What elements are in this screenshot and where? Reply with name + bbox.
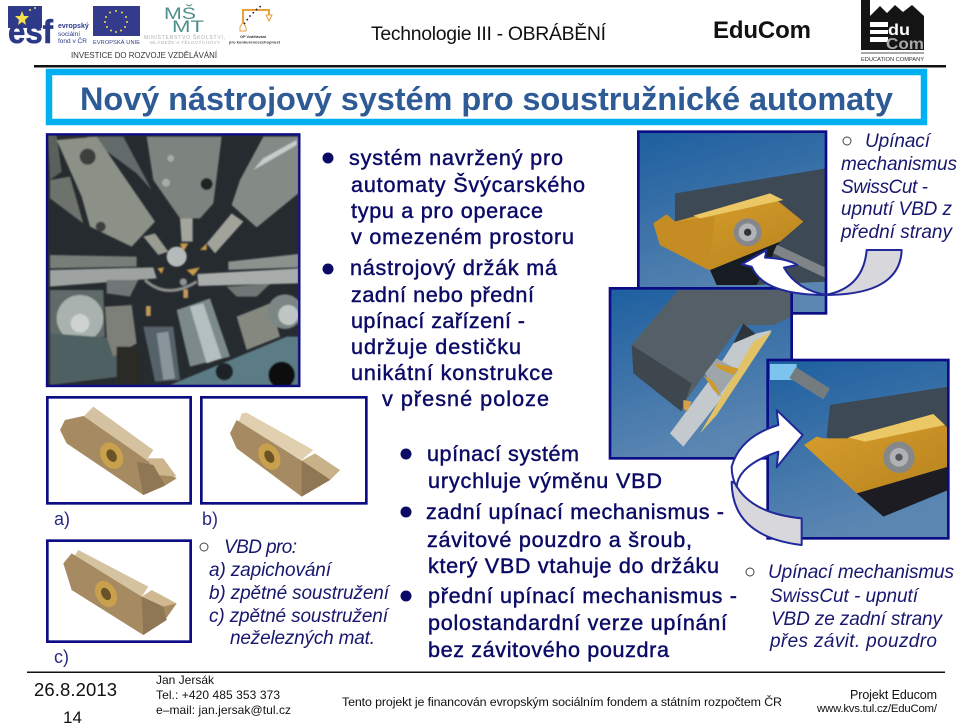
logo: MŠMT: MŠ [164, 4, 196, 23]
callout: front clamping mechanism [840, 131, 958, 243]
callout: rear clamping mechanism: přes závit. pouzdro [769, 631, 937, 652]
footer: project: Projekt Educom [850, 688, 937, 702]
logo: EU flag: EVROPSKÁ UNIE [93, 39, 140, 46]
bulleted text: system description: zadní nebo přední [351, 282, 534, 307]
callout: VBD pro: a) zapichování [209, 560, 333, 581]
logo: ESF evropský sociální fond v ČR: fond v ČR [58, 36, 87, 45]
logo: OP Vzdělávání pro konkurenceschopnost: pro konkurenceschopnost [229, 40, 281, 44]
bulleted text: clamping system: závitové pouzdro a šroub, [427, 527, 692, 552]
bulleted text: system description: unikátní konstrukce [351, 360, 553, 385]
footer rule [27, 672, 945, 673]
logo: EduCom education company [861, 0, 925, 63]
logo: EduCom education company: du [888, 22, 910, 39]
header rule [34, 65, 946, 68]
footer: author contact: Jan Jersák [156, 673, 215, 687]
footer: author contact: Tel.: +420 485 353 373 [156, 688, 280, 702]
bulleted text: clamping system [400, 441, 737, 662]
bulleted text: system description: v omezeném prostoru [351, 224, 574, 249]
callout: rear clamping mechanism: Upínací mechanismus [768, 562, 954, 583]
footer: date: 26.8.2013 [34, 679, 117, 700]
bulleted text: clamping system: upínací systém [427, 441, 579, 466]
logo: MŠMT [144, 4, 225, 45]
photo: SwissCut insert front clamping [638, 132, 827, 313]
bulleted text: system description: upínací zařízení - [351, 308, 525, 333]
footer: author contact: e–mail: jan.jersak@tul.cz [156, 703, 291, 717]
callout: VBD pro: neželezných mat. [230, 628, 375, 649]
logo: ESF evropský sociální fond v ČR: esf [8, 13, 54, 50]
bulleted text: system description: typu a pro operace [351, 198, 543, 223]
logo: MŠMT: MINISTERSTVO ŠKOLSTVÍ, [144, 34, 225, 41]
title: Nový nástrojový systém pro soustružnické automaty [80, 81, 893, 117]
label: c): c) [54, 647, 69, 667]
logo: EduCom education company: EDUCATION COMPANY [861, 57, 925, 63]
logo: MŠMT: MLÁDEŽE A TĚLOVÝCHOVY [150, 38, 220, 45]
label: a): a) [54, 509, 70, 529]
label: b): b) [202, 509, 218, 529]
bulleted text: clamping system: zadní upínací mechanismus - [426, 499, 724, 524]
bulleted text: system description: nástrojový držák má [350, 255, 558, 280]
logo: ESF evropský sociální fond v ČR [8, 6, 89, 50]
bulleted text: system description: automaty Švýcarského [351, 172, 585, 197]
photo: insert a [47, 397, 191, 503]
footer: funding note: Tento projekt je financován evropským sociálním fondem a státním rozpočtem ČR [342, 694, 782, 709]
bulleted text: clamping system: urychluje výměnu VBD [428, 468, 662, 493]
callout: front clamping mechanism: přední strany [840, 222, 954, 243]
logo: OP Vzdělávání pro konkurenceschopnost: OP Vzdělávání [240, 35, 267, 39]
heading: EduCom: EduCom [713, 17, 811, 44]
callout: front clamping mechanism: SwissCut - [841, 177, 928, 198]
footer: project [816, 688, 938, 715]
logo: EduCom education company: Com [886, 36, 924, 53]
bulleted text: clamping system: polostandardní verze upínání [428, 610, 727, 635]
footer: author contact [156, 673, 291, 717]
callout: VBD pro: b) zpětné soustružení [209, 583, 391, 604]
bulleted text: system description: systém navržený pro [349, 145, 563, 170]
heading: course name: Technologie III - OBRÁBĚNÍ [371, 22, 607, 45]
callout: front clamping mechanism: upnutí VBD z [841, 199, 952, 220]
photo: machine tool heads [47, 134, 302, 388]
logo: EU flag [93, 6, 140, 46]
title box [49, 72, 924, 122]
logo: ESF evropský sociální fond v ČR: sociální [58, 31, 80, 38]
callout: rear clamping mechanism [746, 562, 954, 652]
callout: rear clamping mechanism: VBD ze zadní strany [771, 609, 944, 630]
logo: OP Vzdělávání pro konkurenceschopnost [229, 6, 281, 44]
arrow: front clamping [742, 250, 902, 295]
callout: rear clamping mechanism: SwissCut - upnutí [770, 586, 920, 607]
photo: insert cross-section [610, 288, 792, 458]
callout: front clamping mechanism: Upínací [865, 131, 932, 152]
bulleted text: clamping system: který VBD vtahuje do držáku [428, 553, 719, 578]
logo: ESF evropský sociální fond v ČR: evropský [58, 23, 89, 30]
callout: front clamping mechanism: mechanismus [841, 154, 958, 175]
arrow: rear clamping [732, 410, 803, 545]
bulleted text: system description [322, 145, 585, 411]
bulleted text: clamping system: přední upínací mechanismus - [428, 583, 737, 608]
logo: MŠMT: MT [172, 17, 204, 36]
callout: VBD pro: VBD pro: [224, 537, 297, 558]
callout: VBD pro: c) zpětné soustružení [209, 606, 390, 627]
tool illustrations and arrows [610, 132, 902, 458]
callout: VBD pro [200, 537, 391, 649]
photo: insert c [47, 541, 191, 642]
photo: SwissCut insert rear clamping [768, 360, 948, 538]
bulleted text: system description: udržuje destičku [351, 334, 521, 359]
photo: insert b [201, 397, 366, 503]
text: investice do rozvoje vzdělávání: INVESTICE DO ROZVOJE VZDĚLÁVÁNÍ [71, 51, 218, 60]
bulleted text: clamping system: bez závitového pouzdra [428, 637, 670, 662]
footer: project: www.kvs.tul.cz/EduCom/ [816, 703, 938, 715]
bulleted text: system description: v přesné poloze [382, 386, 549, 411]
